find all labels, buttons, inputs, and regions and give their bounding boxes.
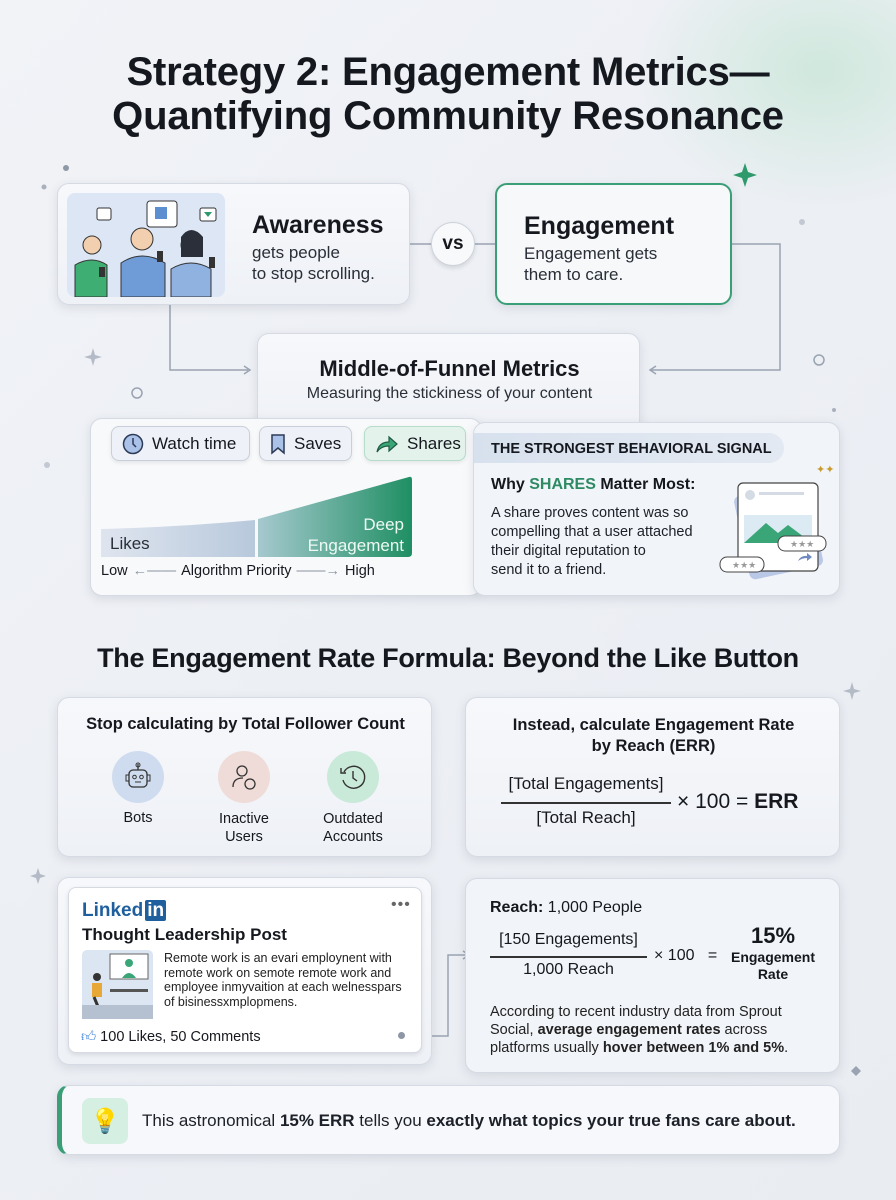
panel: linkedin example <box>57 877 432 1065</box>
result: 15% <box>731 923 815 982</box>
illustration: people on phones <box>67 193 225 297</box>
text: shares explanation: send it to a friend. <box>491 562 606 578</box>
text: shares explanation: A share proves content was so <box>491 505 688 521</box>
icon: shared post: ★★★ <box>790 539 814 549</box>
text: shares explanation <box>491 505 693 578</box>
heading: by Reach (ERR) <box>592 737 715 755</box>
heading: engagement: Engagement <box>524 212 674 240</box>
icon: inactive users: Users <box>225 829 263 845</box>
icon: bots: Bots <box>123 810 152 826</box>
result: 15%: Rate <box>758 966 788 982</box>
label: likes: Likes <box>110 534 150 553</box>
vs badge: vs <box>442 233 464 254</box>
panel: algorithm priority chart <box>90 418 482 596</box>
heading: Instead, calculate Engagement Rate <box>513 716 794 734</box>
label: deep engagement: Engagement <box>308 536 404 555</box>
text: engagement <box>524 244 657 284</box>
subtitle: Measuring the stickiness of your content <box>307 385 592 402</box>
logo: linkedin: Linkedin <box>82 900 164 921</box>
formula: example: [150 Engagements] <box>499 931 638 948</box>
text: awareness: gets people <box>252 243 340 262</box>
heading: Stop calculating by Total Follower Count <box>86 715 405 733</box>
linkedin post: ••• <box>391 896 411 913</box>
formula: × 100 = ERR <box>677 790 798 813</box>
result: 15%: Engagement <box>731 949 815 965</box>
text: shares explanation: their digital reputation to <box>491 543 646 559</box>
reach: Reach: 1,000 People <box>490 899 642 916</box>
icon: lightbulb: 💡 <box>90 1108 120 1134</box>
linkedin post <box>68 887 422 1053</box>
heading: middle-of-funnel: Middle-of-Funnel Metrics <box>319 356 580 381</box>
icon: lightbulb <box>82 1098 128 1144</box>
title <box>112 50 784 138</box>
title: Strategy 2: Engagement Metrics— <box>127 50 769 94</box>
post stats: 👍︎ 100 Likes, 50 Comments <box>81 1029 261 1045</box>
formula: example: × 100 = <box>654 947 717 964</box>
heading <box>513 716 794 755</box>
text: awareness <box>252 243 375 283</box>
section heading: engagement rate formula: The Engagement Rate Formula: Beyond the Like Button <box>97 643 799 673</box>
panel: example calculation <box>465 878 840 1073</box>
icon: outdated accounts: Accounts <box>323 829 383 845</box>
pill: saves <box>259 426 352 461</box>
header band <box>474 433 784 463</box>
text: awareness: to stop scrolling. <box>252 264 375 283</box>
axis: algorithm priority: ←—— <box>133 563 176 579</box>
panel: stop calculating by follower count <box>57 697 432 857</box>
icon: shared post: ✦✦ <box>816 463 834 476</box>
icon: inactive users: Inactive <box>219 811 269 827</box>
icon: shared post <box>720 463 834 580</box>
formula: example <box>490 931 717 978</box>
formula: [Total Engagements] <box>508 774 663 793</box>
pill: watch time: Watch time <box>152 434 236 452</box>
formula <box>501 774 798 827</box>
callout: shares signal <box>473 422 840 596</box>
chart: likes vs deep engagement <box>101 476 412 557</box>
icon: outdated accounts <box>323 751 383 845</box>
icon: shared post: ★★★ <box>732 560 756 570</box>
axis: algorithm priority: ——→ <box>296 563 340 579</box>
panel: ERR formula <box>465 697 840 857</box>
icon: outdated accounts: Outdated <box>323 811 383 827</box>
text: industry data: According to recent industry data from Sprout Social, average engagement rates across platforms usually hover between 1% and 5%. <box>490 1004 788 1056</box>
pill: shares <box>364 426 466 461</box>
card: engagement <box>495 183 732 305</box>
pill: watch time <box>111 426 250 461</box>
result: 15%: 15% <box>751 923 795 948</box>
title: Quantifying Community Resonance <box>112 94 784 138</box>
heading: awareness: Awareness <box>252 211 384 239</box>
card: awareness <box>57 183 410 305</box>
text: shares explanation: compelling that a user attached <box>491 524 693 540</box>
axis: algorithm priority: Low Algorithm Priority High <box>101 563 375 579</box>
card: middle-of-funnel header <box>257 333 640 433</box>
vs badge <box>431 222 475 266</box>
heading: why shares: Why SHARES Matter Most: <box>491 476 695 493</box>
formula: [Total Reach] <box>536 808 636 827</box>
label: deep engagement: Deep <box>363 515 404 534</box>
post text: Remote work is an evari employnent with remote work on semote remote work and employee inmyvaition at each welnesspars of bisinessxmplopmens. <box>164 951 402 1008</box>
text: engagement: them to care. <box>524 265 623 284</box>
header band: THE STRONGEST BEHAVIORAL SIGNAL <box>491 441 772 457</box>
banner: key takeaway <box>57 1085 840 1155</box>
label: deep engagement <box>308 515 404 555</box>
takeaway text: This astronomical 15% ERR tells you exactly what topics your true fans care about. <box>142 1111 796 1130</box>
post image <box>82 950 153 1019</box>
pill: saves: Saves <box>294 434 341 452</box>
pill: shares: Shares <box>407 434 461 452</box>
text: engagement: Engagement gets <box>524 244 657 263</box>
formula: example: 1,000 Reach <box>523 961 614 978</box>
icon: inactive users <box>218 751 270 845</box>
post title: Thought Leadership Post <box>82 925 287 944</box>
icon: bots <box>112 751 164 826</box>
